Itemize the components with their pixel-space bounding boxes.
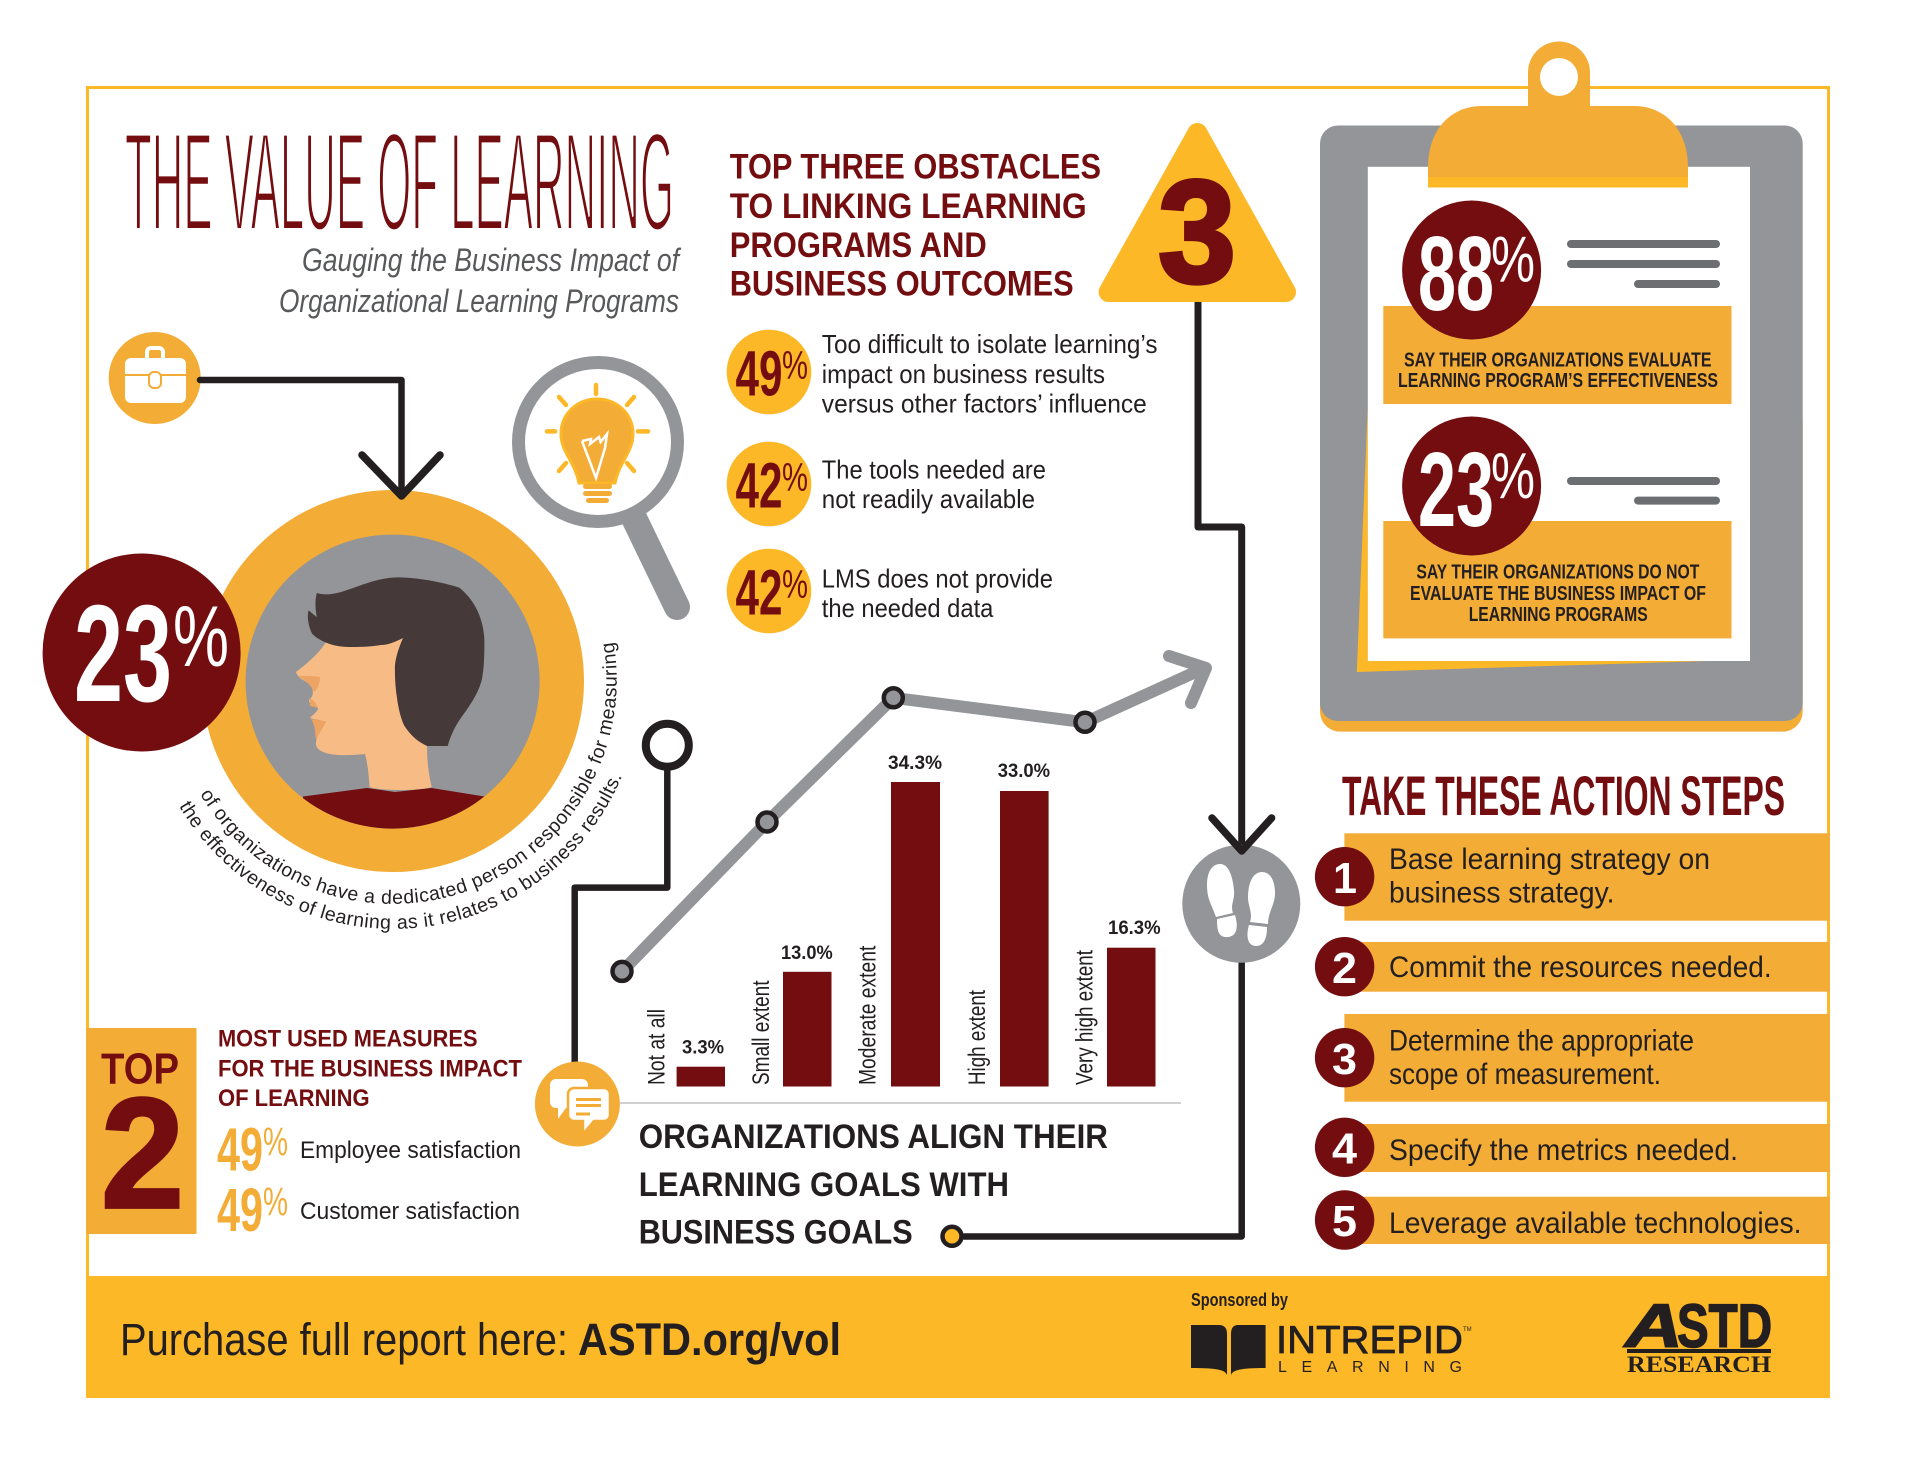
footer: ASTD Research logo: STD [1677, 1292, 1772, 1360]
heading: most used measures: FOR THE BUSINESS IMPACT [218, 1056, 522, 1082]
clipboard clip [1428, 42, 1688, 188]
heading: top three obstacles [730, 148, 1101, 304]
bar: moderate extent [855, 752, 942, 1086]
face [296, 638, 432, 790]
bar: small extent [748, 942, 833, 1086]
subtitle: Gauging the Business Impact of [302, 242, 682, 278]
obstacle: 42% tools: 42 [736, 450, 782, 522]
bar: small extent: Small extent [748, 980, 775, 1085]
23% badge [43, 554, 241, 752]
card: 88% [1383, 200, 1732, 404]
heading: organizations align [639, 1118, 1108, 1252]
bar: not at all [643, 1009, 725, 1086]
clipboard [1320, 42, 1803, 732]
icon: briefcase [109, 332, 201, 424]
heading: top three obstacles: BUSINESS OUTCOMES [730, 265, 1074, 304]
curved caption: the effectiveness of learning as it relates to business results. [180, 776, 622, 933]
card: 88%: 88 [1418, 215, 1494, 333]
text: THE VALUE OF LEARNING [125, 103, 674, 260]
bar: not at all: Not at all [643, 1009, 670, 1085]
action step 4 [1315, 1118, 1830, 1177]
action step 3: 3 [1332, 1035, 1357, 1084]
icon: footprints [1182, 845, 1300, 963]
card: 88%: LEARNING PROGRAM’S EFFECTIVENESS [1398, 370, 1718, 392]
bar: high extent: High extent [964, 990, 991, 1085]
bar: moderate extent: 34.3% [888, 752, 942, 774]
frame [88, 88, 1828, 1288]
obstacle: 42% LMS: LMS does not provide [822, 564, 1053, 594]
stat: employee satisfaction: Employee satisfaction [300, 1137, 521, 1164]
footer: ASTD Research logo: RESEARCH [1627, 1352, 1771, 1377]
bar: very high extent [1071, 917, 1161, 1086]
bar: very high extent: Very high extent [1071, 950, 1098, 1085]
heading: organizations align: ORGANIZATIONS ALIGN THEIR [639, 1118, 1108, 1156]
card: 23%: % [1491, 439, 1535, 512]
top 2 badge: TOP [101, 1044, 179, 1093]
action step 5 [1315, 1190, 1830, 1250]
stat: employee satisfaction: % [263, 1120, 288, 1164]
card: 23%: SAY THEIR ORGANIZATIONS DO NOT [1416, 562, 1699, 584]
heading: most used measures: MOST USED MEASURES [218, 1026, 478, 1053]
action step 3: scope of measurement. [1389, 1058, 1661, 1091]
bar: not at all: 3.3% [682, 1037, 724, 1059]
heading: organizations align: LEARNING GOALS WITH [639, 1166, 1009, 1204]
warning triangle: 3 [1158, 150, 1236, 313]
icon: light bulb [547, 385, 648, 503]
curved caption: of organizations have a dedicated person responsible for measuring [202, 643, 618, 904]
action step 2: 2 [1332, 944, 1357, 993]
bar: very high extent: 16.3% [1108, 917, 1161, 939]
heading: top three obstacles: TO LINKING LEARNING [730, 187, 1087, 226]
bar: high extent [964, 760, 1050, 1086]
obstacle: 49%: 49 [736, 338, 782, 410]
action step 5: Leverage available technologies. [1389, 1207, 1802, 1240]
person portrait [202, 490, 584, 872]
obstacle: 42% LMS [727, 549, 1053, 633]
obstacle: 42% LMS: 42 [736, 557, 782, 629]
stat: customer satisfaction [217, 1176, 520, 1244]
bar: moderate extent: Moderate extent [855, 945, 882, 1085]
stat: employee satisfaction: 49 [217, 1116, 263, 1184]
arrowhead into footprints [1212, 818, 1272, 851]
stat: customer satisfaction: 49 [217, 1176, 263, 1244]
connector: goals to footprints [942, 960, 1242, 1246]
obstacle: 49%: % [782, 344, 808, 388]
footer: sponsor logo [1191, 1290, 1472, 1376]
connector: triangle to footprints [1198, 302, 1242, 848]
obstacle: 42% tools: not readily available [822, 484, 1035, 514]
card: 23%: 23 [1418, 431, 1494, 549]
action step 5: 5 [1332, 1197, 1357, 1246]
bar chart [643, 752, 1161, 1086]
obstacle: 49% [727, 329, 1158, 418]
bar: small extent: 13.0% [781, 942, 833, 964]
obstacle: 42% tools: % [782, 456, 808, 500]
top 2 badge: 2 [101, 1066, 184, 1241]
obstacle: 49%: versus other factors’ influence [822, 388, 1147, 418]
23% badge: % [173, 589, 229, 685]
stat: customer satisfaction: % [263, 1181, 288, 1225]
footer: sponsor logo: INTREPID [1276, 1319, 1463, 1362]
footer band [86, 1276, 1830, 1398]
obstacle: 42% LMS: the needed data [822, 593, 994, 623]
icon: speech bubbles [535, 1062, 620, 1146]
hair [308, 577, 484, 746]
action step 2 [1315, 937, 1830, 996]
subtitle [279, 242, 682, 319]
action step 3: Determine the appropriate [1389, 1025, 1694, 1058]
23% badge: 23 [74, 577, 172, 731]
obstacle: 49%: impact on business results [822, 359, 1105, 389]
card: 23%: EVALUATE THE BUSINESS IMPACT OF [1410, 583, 1706, 605]
footer: sponsor logo: Sponsored by [1191, 1290, 1288, 1310]
connector: speech icon to open ring [575, 724, 689, 1063]
stat: customer satisfaction: Customer satisfaction [300, 1198, 520, 1225]
subtitle: Organizational Learning Programs [279, 283, 679, 319]
heading: top three obstacles: TOP THREE OBSTACLES [730, 148, 1101, 187]
magnifying glass with light bulb [518, 362, 678, 607]
card: 23%: LEARNING PROGRAMS [1469, 604, 1648, 626]
heading: most used measures: OF LEARNING [218, 1085, 370, 1112]
action step 1: 1 [1333, 854, 1357, 903]
action step 1: business strategy. [1389, 877, 1614, 910]
action step 2: Commit the resources needed. [1389, 951, 1772, 984]
footer: purchase call to action: Purchase full report here: [120, 1314, 568, 1365]
warning triangle [1109, 133, 1286, 313]
action step 4: 4 [1332, 1124, 1358, 1174]
connector: briefcase to portrait arrow [200, 380, 440, 496]
obstacle: 42% LMS: % [782, 563, 808, 607]
action step 1: Base learning strategy on [1389, 843, 1710, 876]
footer: ASTD Research logo: A [1622, 1292, 1683, 1360]
obstacle: 42% tools: The tools needed are [822, 455, 1046, 485]
footer: ASTD Research logo [1622, 1292, 1772, 1377]
top 2 badge [86, 1028, 196, 1241]
card: 88%: SAY THEIR ORGANIZATIONS EVALUATE [1404, 350, 1712, 372]
heading: top three obstacles: PROGRAMS AND [730, 226, 987, 265]
footer: sponsor logo: LEARNING [1278, 1359, 1462, 1376]
footer: sponsor logo: TM [1463, 1327, 1472, 1333]
bar: high extent: 33.0% [998, 760, 1050, 782]
trend line with arrow [612, 656, 1206, 981]
shirt [303, 788, 484, 829]
obstacle: 49%: Too difficult to isolate learning’s [822, 329, 1158, 359]
card: 23% [1383, 416, 1732, 638]
action step 1 [1315, 833, 1830, 921]
footer: purchase call to action: ASTD.org/vol [578, 1314, 841, 1365]
obstacle: 42% tools [727, 442, 1046, 526]
action step 4: Specify the metrics needed. [1389, 1134, 1738, 1167]
stat: employee satisfaction [217, 1116, 521, 1184]
card: 88%: % [1491, 223, 1535, 296]
heading: most used measures [218, 1026, 522, 1112]
action step 3 [1315, 1014, 1830, 1102]
heading: organizations align: BUSINESS GOALS [639, 1214, 913, 1252]
